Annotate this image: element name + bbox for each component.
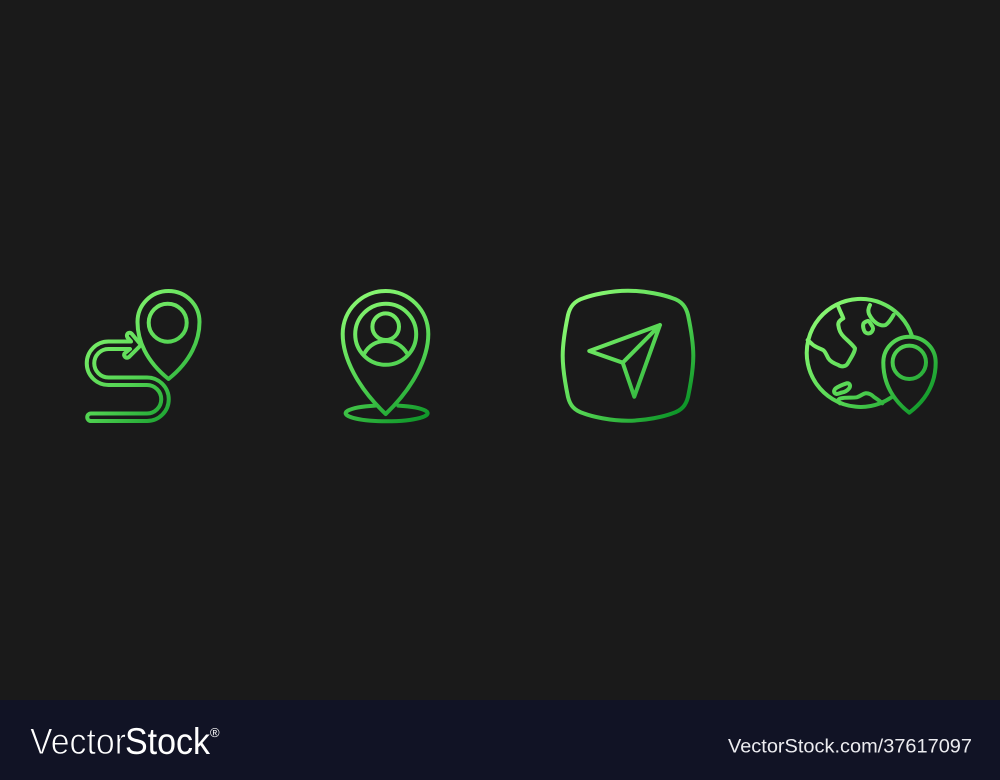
image id: VectorStock.com/37617097	[728, 736, 972, 758]
icon: navigation arrow in rounded square	[563, 291, 693, 421]
rounded square	[563, 291, 693, 421]
ground ellipse	[346, 406, 428, 421]
avatar circle	[355, 304, 416, 365]
globe outline	[807, 299, 912, 407]
pin circle	[893, 346, 926, 379]
paper plane	[589, 325, 660, 397]
logo: VectorStock: Vector	[30, 721, 126, 762]
island	[863, 321, 873, 333]
footer bar	[0, 700, 1000, 780]
icon: person location pin	[343, 291, 428, 421]
avatar head	[372, 313, 399, 340]
icon: globe with location pin	[807, 299, 936, 413]
continent: left	[808, 307, 855, 366]
icon: route to location pin	[87, 291, 200, 421]
pin circle	[149, 304, 187, 342]
location pin	[883, 337, 936, 413]
continent: bottom	[838, 393, 882, 403]
logo: VectorStock	[30, 721, 220, 762]
island: lower	[834, 383, 850, 394]
arrow head	[122, 333, 141, 358]
location pin	[138, 291, 200, 379]
avatar shoulders	[364, 341, 408, 354]
pin outline	[343, 291, 428, 414]
logo: VectorStock: Stock	[125, 721, 210, 762]
winding route with arrow	[87, 342, 169, 421]
continent: top right	[868, 305, 894, 325]
logo: VectorStock: ®	[210, 725, 220, 740]
